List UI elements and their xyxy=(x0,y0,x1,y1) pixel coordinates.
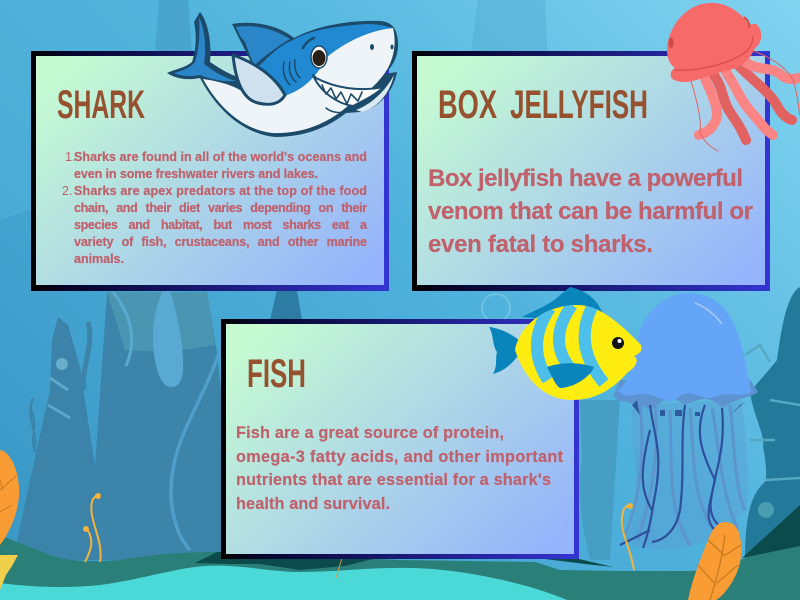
text block: shark facts list: Sharks are found in all of the world's oceans and xyxy=(74,150,367,164)
text block: fish fact: Fish are a great source of protein, xyxy=(236,424,504,442)
text block: fish fact xyxy=(236,424,564,513)
text block: shark facts list xyxy=(62,150,368,266)
icon: yellow fish xyxy=(489,287,641,400)
text block: box jellyfish fact: even fatal to sharks. xyxy=(428,231,653,258)
icon: coral jellyfish xyxy=(667,3,800,151)
text block: shark facts list: even in some freshwater rivers and lakes. xyxy=(74,167,318,181)
text block: shark facts list: 2. xyxy=(62,184,73,198)
seabed hills xyxy=(0,505,800,600)
panel: fish xyxy=(221,319,579,559)
text block: shark facts list: species and habitat, but most sharks eat a xyxy=(74,218,368,232)
text block: shark facts list: 1. xyxy=(65,150,76,164)
panel: shark xyxy=(31,51,389,291)
seaweed: yellow sprigs xyxy=(84,494,634,578)
text block: shark facts list: Sharks are apex predators at the top of the food xyxy=(74,184,367,198)
right coral leaf xyxy=(688,522,741,600)
text block: box jellyfish fact: venom that can be harmful or xyxy=(428,198,753,225)
text block: box jellyfish fact xyxy=(428,165,753,258)
text block: shark facts list: animals. xyxy=(74,252,124,266)
heading: box jellyfish: BOX xyxy=(438,83,497,127)
text block: box jellyfish fact: Box jellyfish have a powerful xyxy=(428,165,743,192)
heading: box jellyfish xyxy=(438,83,648,127)
heading: shark: SHARK xyxy=(57,83,145,127)
icon: shark mascot xyxy=(167,12,398,137)
heading: box jellyfish: JELLYFISH xyxy=(510,83,648,127)
text block: fish fact: omega-3 fatty acids, and other important xyxy=(236,448,564,466)
heading: fish: FISH xyxy=(247,352,306,396)
text block: fish fact: nutrients that are essential for a shark's xyxy=(236,471,551,489)
text block: fish fact: health and survival. xyxy=(236,495,390,513)
text block: shark facts list: variety of fish, crustaceans, and other marine xyxy=(74,235,367,249)
text block: shark facts list: chain, and their diet varies depending on their xyxy=(74,201,367,215)
left coral leaf xyxy=(0,450,19,590)
panel: box jellyfish xyxy=(412,51,770,291)
background: blue jellyfish xyxy=(614,293,758,550)
